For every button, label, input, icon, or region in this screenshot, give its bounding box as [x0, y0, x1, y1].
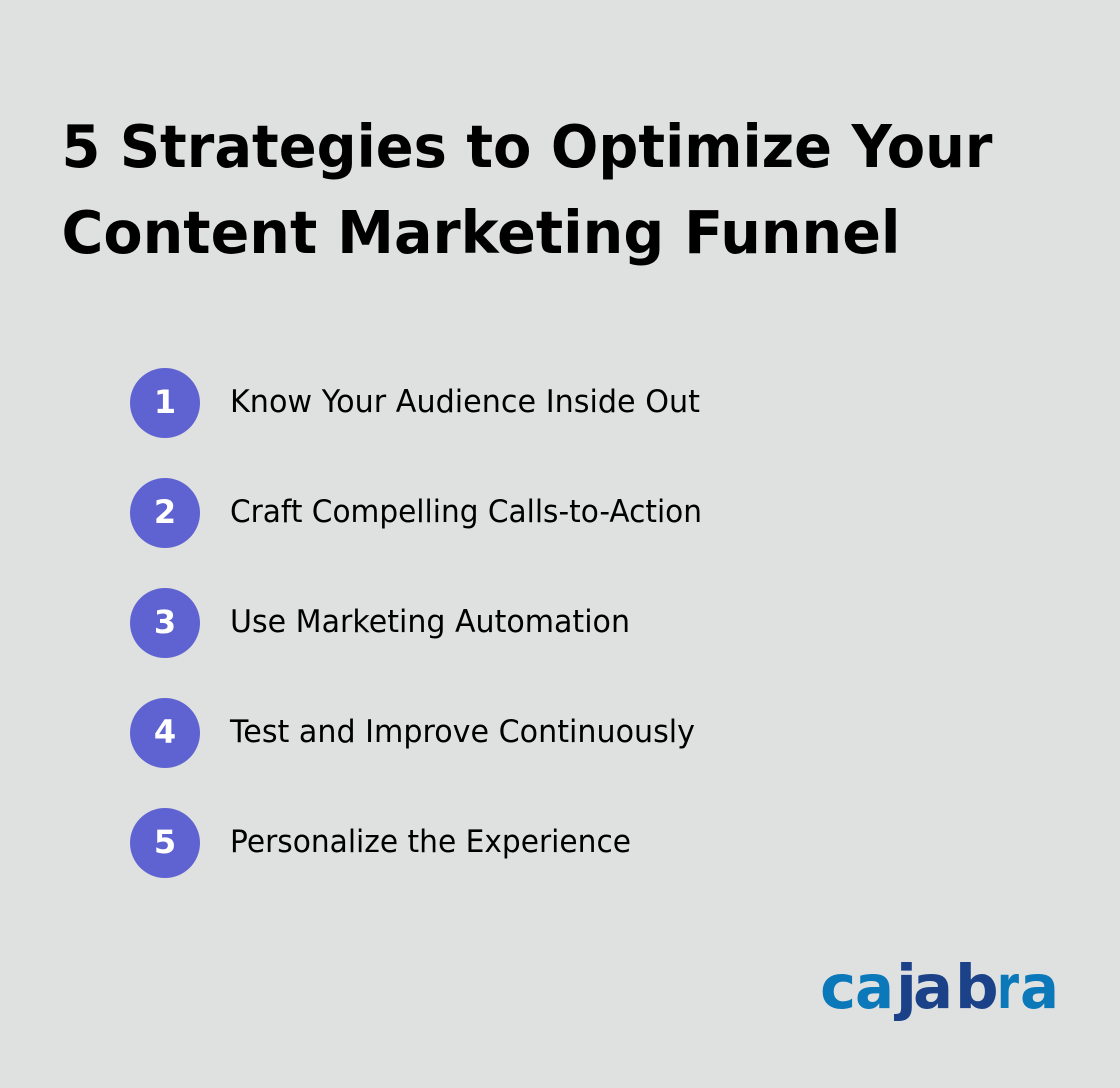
- title: 5 Strategies to Optimize Your: [62, 113, 993, 181]
- logo: cajabra: a: [855, 952, 894, 1023]
- item 5: Personalize the Experience: [230, 824, 631, 860]
- item 5: [130, 808, 631, 878]
- item 3: Use Marketing Automation: [230, 604, 630, 640]
- item 2: Craft Compelling Calls-to-Action: [230, 494, 702, 530]
- item 1: Know Your Audience Inside Out: [230, 384, 700, 420]
- item 1: [130, 368, 700, 438]
- item 2: 2: [154, 493, 176, 531]
- item 3: [130, 588, 630, 658]
- item 3: 3: [154, 603, 176, 641]
- logo: cajabra: r: [997, 952, 1019, 1023]
- item 1: 1: [154, 383, 176, 421]
- strategy list: [130, 368, 702, 878]
- logo: cajabra: a: [1020, 952, 1059, 1023]
- logo: cajabra: a: [913, 952, 953, 1023]
- item 5: 5: [154, 823, 176, 861]
- logo: cajabra: j: [893, 952, 917, 1023]
- logo: cajabra: [820, 952, 1059, 1023]
- logo: cajabra: c: [820, 952, 856, 1023]
- title: Content Marketing Funnel: [62, 199, 900, 267]
- item 4: [130, 698, 695, 768]
- item 4: Test and Improve Continuously: [229, 714, 695, 750]
- title: [62, 113, 993, 267]
- item 4: 4: [154, 713, 176, 751]
- item 2: [130, 478, 702, 548]
- logo: cajabra: b: [955, 952, 999, 1023]
